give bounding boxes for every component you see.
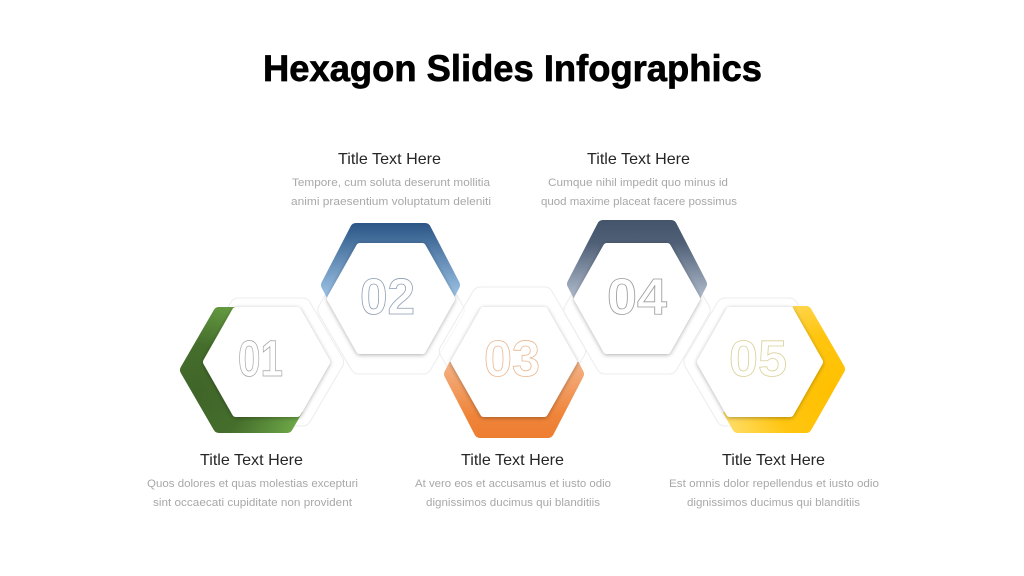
ghost hexagon 4 [564, 246, 710, 374]
white hexagon 1 [207, 311, 326, 413]
yellow hexagon 5 [705, 312, 839, 427]
number 02: 02 [360, 268, 415, 325]
body 04: quod maxime placeat facere possimus [541, 196, 738, 208]
white hexagon 2 [331, 247, 451, 350]
white hexagon 5 [701, 311, 819, 413]
ghost hexagon 3 [439, 287, 586, 415]
white hexagon 4 [578, 247, 696, 350]
body 03: dignissimos ducimus qui blanditiis [426, 497, 601, 509]
ghost hexagon 2 [318, 246, 464, 374]
number 01: 01 [238, 330, 283, 387]
text block 03 [415, 452, 611, 509]
body 04 [541, 177, 738, 208]
text block 04 [541, 151, 738, 208]
green hexagon 1 [186, 313, 320, 427]
blue hexagon 2 [321, 223, 460, 298]
heading 01: Title Text Here [200, 452, 303, 469]
body 02: animi praesentium voluptatum deleniti [291, 196, 491, 208]
text block 05 [669, 452, 879, 509]
heading 05: Title Text Here [722, 452, 825, 469]
heading 03: Title Text Here [461, 452, 564, 469]
number 03: 03 [484, 330, 540, 387]
text block 02 [291, 151, 491, 208]
ghost hexagon 1 [197, 298, 344, 426]
heading 02: Title Text Here [338, 151, 441, 168]
body 02 [291, 177, 491, 208]
hexagon chain [186, 226, 839, 432]
body 03: At vero eos et accusamus et iusto odio [415, 478, 611, 490]
white hexagon 3 [455, 311, 573, 413]
body 05: Est omnis dolor repellendus et iusto odio [669, 478, 879, 490]
body 01: Quos dolores et quas molestias excepturi [147, 478, 358, 490]
slate hexagon 4 [567, 220, 707, 298]
body 05: dignissimos ducimus qui blanditiis [687, 497, 861, 509]
title: Hexagon Slides Infographics [263, 48, 762, 89]
heading 04: Title Text Here [587, 151, 690, 168]
body 01 [147, 478, 358, 509]
ghost hexagon 5 [684, 298, 830, 426]
body 02: Tempore, cum soluta deserunt mollitia [292, 177, 491, 189]
body 01: sint occaecati cupiditate non provident [153, 497, 352, 509]
body 04: Cumque nihil impedit quo minus id [548, 177, 728, 189]
body 03 [415, 478, 611, 509]
number 05: 05 [729, 330, 787, 387]
text block 01 [147, 452, 358, 509]
number 04: 04 [607, 268, 668, 325]
body 05 [669, 478, 879, 509]
orange hexagon 3 [444, 362, 584, 438]
